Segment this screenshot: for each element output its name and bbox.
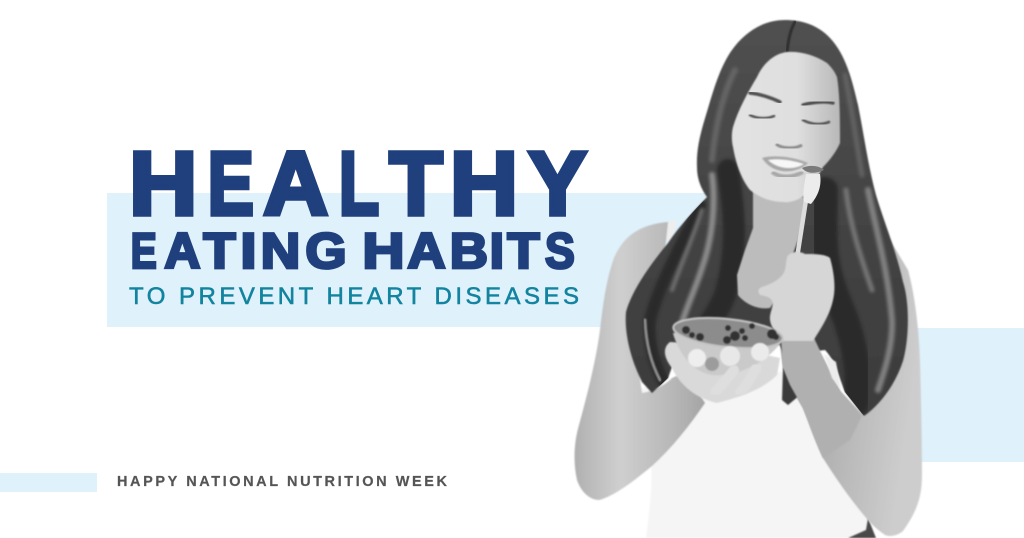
bowl	[672, 313, 784, 375]
fork	[797, 166, 824, 258]
background panel: right band	[915, 328, 1024, 462]
shoulder strap	[662, 220, 677, 242]
title: eating habits: I	[490, 223, 504, 279]
title: eating habits	[131, 223, 575, 279]
background panel: main band	[107, 193, 707, 327]
title: healthy: L	[339, 134, 379, 234]
title: eating habits: S	[545, 223, 575, 279]
tank top	[640, 350, 868, 538]
neck and chest	[737, 190, 807, 308]
right wrist and forearm	[781, 338, 862, 458]
background panel: small footer band	[0, 473, 97, 492]
title: healthy: H	[129, 134, 198, 234]
title: eating habits: H	[362, 223, 405, 279]
photo: woman eating from a bowl	[575, 20, 922, 538]
jeans	[848, 518, 876, 538]
title: eating habits: A	[164, 223, 200, 279]
subtitle: TO PREVENT HEART DISEASES	[129, 283, 579, 310]
face	[732, 52, 840, 202]
title: eating habits: B	[450, 223, 488, 279]
left arm	[575, 222, 705, 500]
title: healthy: A	[263, 134, 328, 234]
title: eating habits: E	[131, 223, 157, 279]
title: eating habits: A	[407, 223, 446, 279]
holding hand	[665, 342, 780, 403]
title: eating habits: T	[203, 223, 236, 279]
title: healthy: E	[208, 134, 254, 234]
title: eating habits: T	[507, 223, 540, 279]
title: eating habits: G	[305, 223, 347, 279]
fingers over bowl	[715, 367, 757, 392]
strand below bowl	[782, 368, 800, 405]
right arm	[780, 240, 922, 536]
raising hand	[758, 252, 834, 341]
title: healthy: Y	[528, 134, 587, 234]
title: healthy: H	[450, 134, 518, 234]
title: healthy: T	[389, 134, 443, 234]
eyebrows, eyes, nose and mouth	[750, 93, 833, 176]
hair mass	[626, 20, 908, 416]
title: eating habits: I	[240, 223, 257, 279]
title: healthy	[129, 134, 587, 234]
hair strands	[645, 22, 892, 405]
title: eating habits: N	[261, 223, 300, 279]
footer text: HAPPY NATIONAL NUTRITION WEEK	[117, 474, 448, 490]
tank sliver beside wrist	[824, 354, 841, 390]
